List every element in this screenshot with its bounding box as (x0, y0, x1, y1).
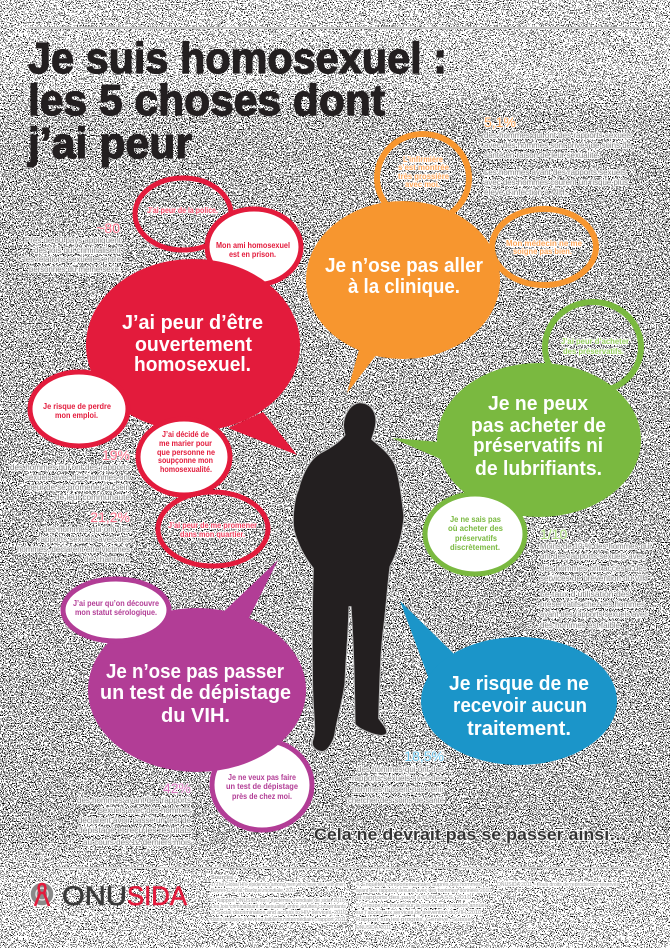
statistic: 18,5%: des hommes qui ont des (357, 764, 444, 774)
statistic: 5,1% (484, 114, 632, 197)
sources text: ONUSIDA 2011 – Tous droits de reproduction réservés (497, 882, 619, 888)
statistic: about 80 countries (24, 220, 122, 274)
white bubble: where to buy: discrètement. (450, 542, 500, 552)
logo: ONUSIDA: SIDA (127, 881, 187, 911)
white bubble: serological status (63, 579, 169, 641)
main purple bubble: du VIH. (161, 705, 230, 727)
title: j’ai peur (27, 119, 192, 168)
main red bubble (86, 259, 300, 455)
statistic: 18,5%: 18,5% (404, 748, 444, 764)
outline bubble: doctor: soigne pas bien. (513, 246, 572, 256)
title (27, 34, 447, 168)
sources text: ONUSIDA, 2011 (356, 925, 391, 931)
main green bubble: Je ne peux (488, 393, 588, 415)
outline bubble: doctor: Mon médecin ne me (506, 238, 582, 248)
statistic: 5,1%: élevé d’infection à VIH. (484, 187, 567, 197)
panel: risk of no treatment (400, 601, 617, 765)
white bubble: getting married: me marier pour (159, 438, 213, 448)
statistic: about 80 countries: les relations sexuelles entre (24, 254, 121, 264)
main purple bubble: un test de dépistage (100, 682, 291, 704)
white bubble: getting married: homosexualité. (160, 464, 212, 474)
panel: fear of being openly homosexual (30, 178, 301, 566)
bubble text: test near home (226, 772, 298, 801)
statistic: 21,2%: de chantage (84, 554, 130, 564)
statistic: 42%: des hommes ayant des rapports (77, 795, 191, 805)
outline bubble: nurse: avec moi. (405, 179, 440, 189)
sources text: dans les pays à revenu faible ou intermédiaire, rapport 2011 (211, 917, 346, 923)
main orange bubble (306, 201, 500, 393)
outline bubble: nurse (377, 134, 469, 222)
statistic: 21,2%: rapports sexuels avec des (38, 534, 130, 544)
statistic: 5,1%: avec des hommes sont privés de soins de (484, 140, 631, 150)
statistic: 1/10: préservatifs chez les hommes (540, 599, 645, 609)
sources text: 3. Social discrimination and access to HIV services, 2010 (211, 910, 346, 916)
statistic: about 80 countries: personnes du même sexe. (29, 264, 121, 274)
title: les 5 choses dont (28, 76, 385, 125)
main green bubble (392, 363, 641, 517)
panel: afraid to take an HIV test (63, 560, 312, 830)
main blue bubble: recevoir aucun (453, 695, 587, 717)
main red bubble: ouvertement (135, 334, 252, 356)
main purple bubble (88, 560, 306, 772)
main green bubble: de lubrifiants. (475, 458, 602, 480)
statistic: 5,1%: santé en raison de leur sexualité. (484, 150, 600, 160)
statistic: about 80 countries: Près de 80 pays appliquent (25, 235, 122, 245)
statistic: 1/10: ont des rapports sexuels avec (540, 551, 646, 561)
bubble text: test near home: près de chez moi. (232, 791, 292, 801)
sources text: Rapport sur les progrès, Genève, Suisse (356, 917, 471, 923)
statistic: 5,1%: 5,1% (484, 114, 516, 130)
white bubble: friend in prison: est en prison. (229, 249, 276, 259)
outline bubble: nurse: s’est montrée (398, 162, 449, 172)
statistic: about 80 countries: ~80 (96, 220, 120, 236)
statistic: 19%: sexuels avec des hommes ont (25, 472, 131, 482)
statistic: 1/10: 1/10 (540, 526, 567, 542)
white bubble: serological status: mon statut sérologique. (75, 607, 157, 617)
statistic: 18,5% (348, 748, 444, 805)
bubble text: test near home: Je ne veux pas faire (228, 772, 296, 782)
closing statement: Cela ne devrait pas se passer ainsi… (314, 825, 627, 844)
main blue bubble (400, 601, 617, 765)
statistic: 19%: peur de se promener au sein (28, 482, 130, 492)
white bubble: where to buy (425, 494, 525, 574)
statistic: 5,1%: des hommes qui ont des rapports sexuels (484, 130, 632, 140)
outline bubble: neighbourhood: J’ai peur de me promener (168, 520, 258, 530)
sources text: 2. Rapport ONUSIDA sur l’épidémie mondiale de sida, 2010. (211, 898, 346, 904)
statistic: 19%: 19% (102, 447, 130, 463)
statistic: 21,2% (17, 509, 130, 564)
statistic: 19%: de leur communauté (55, 492, 130, 502)
white bubble: where to buy: préservatifs (455, 533, 497, 543)
white bubble: losing job: Je risque de perdre (43, 401, 111, 411)
white bubble: where to buy: où acheter des (448, 523, 503, 533)
statistic: 19%: des hommes qui ont des rapports (10, 462, 130, 472)
outline bubble: nurse: L’infirmière (403, 154, 443, 164)
silhouette of a man (293, 403, 404, 752)
statistic: 42%: déclarent avoir passé un test de (78, 815, 191, 825)
main blue bubble: Je risque de ne (449, 673, 589, 695)
white bubble: friend in prison (207, 209, 301, 285)
main red bubble: J’ai peur d’être (122, 312, 263, 334)
bubble text: test near home: un test de dépistage (226, 781, 298, 791)
main blue bubble: traitement. (467, 718, 571, 740)
outline bubble: doctor (492, 209, 596, 285)
outline bubble: neighbourhood (158, 492, 268, 566)
white bubble: getting married: J’ai décidé de (162, 429, 209, 439)
white bubble: getting married: que personne ne (157, 447, 215, 457)
logo: ONUSIDA: ONU (62, 881, 127, 911)
statistic: 1/10: services de prévention du VIH (540, 573, 648, 583)
outline bubble: afraid to buy condoms (545, 302, 641, 392)
sources text (211, 875, 619, 931)
white bubble: where to buy: Je ne sais pas (450, 514, 501, 524)
statistic: 5,1%: avec des hommes courent un risque plus (484, 177, 628, 187)
statistic: 1/10: Le taux d’utilisation des (540, 589, 630, 599)
statistic: 18,5%: rapports sexuels avec des (352, 773, 444, 783)
title: Je suis homosexuel : (28, 34, 447, 83)
sources text: Sources : (211, 875, 237, 881)
statistic: 42% (77, 780, 191, 847)
white bubble: losing job: mon emploi. (55, 410, 98, 420)
outline bubble: police (135, 178, 231, 250)
statistic: 18,5%: hommes n’osent pas venir (352, 784, 444, 794)
statistic: 1/10 (540, 526, 651, 630)
main purple bubble: Je n’ose pas passer (106, 661, 284, 683)
main green bubble: préservatifs ni (473, 435, 603, 457)
sources text: et rapports des pays à l’UNGASS, 2010 (356, 895, 471, 901)
statistic: 21,2%: des hommes qui ont des (43, 524, 130, 534)
white bubble: losing job (30, 372, 128, 446)
sources text: sur l’accès aux services de prévention du VIH, 2010 (356, 910, 481, 916)
statistic: 1/10: ayant des rapports sexuels avec (540, 609, 649, 619)
main red bubble: homosexuel. (134, 354, 251, 376)
sources text: Beyrer C, et al. Banque mondiale, 2011 (211, 888, 296, 894)
statistic: 19% (10, 447, 131, 502)
white bubble: test near home (212, 740, 312, 830)
statistic: 18,5%: chercher des soins de santé (348, 795, 444, 805)
statistic: about 80 countries: des lois qui criminalisent (34, 245, 122, 255)
statistic: 1/10: des hommes est faible (540, 620, 620, 630)
icon: emblem with red ribbon (30, 882, 54, 906)
statistic: 42%: dépistage et reçu les résultats (78, 825, 191, 835)
panel: afraid to go to the clinic (306, 134, 596, 393)
main orange bubble: Je n’ose pas aller (325, 255, 483, 277)
sources text: 5. Groupe de travail sur la prévention, rapport annuel (356, 903, 486, 909)
white bubble: serological status: J’ai peur qu’on découvre (73, 598, 159, 608)
sources text: 4. Enquêtes comportementales auprès des hommes (356, 882, 481, 888)
outline bubble: police: J’ai peur de la police. (147, 205, 218, 215)
statistic: 42%: sexuels avec des hommes (99, 805, 191, 815)
outline bubble: afraid to buy condoms: J’ai peur d’acheter (561, 336, 630, 346)
outline bubble: neighbourhood: dans mon quartier. (180, 529, 245, 539)
sources text: Les lois criminalisant la sexualité entre adultes consentants (211, 904, 346, 910)
statistic: 42%: 42% (163, 780, 191, 796)
panel: cannot buy condoms or lubricants (392, 302, 641, 574)
statistic: 42%: au cours des 12 derniers mois (83, 837, 191, 847)
outline bubble: nurse: très grossière (398, 171, 449, 181)
main green bubble: pas acheter de (471, 415, 606, 437)
statistic: 5,1%: Les hommes ayant des rapports sexuels (484, 167, 626, 177)
sources text: ayant des rapports sexuels avec des hommes, données 2010 (356, 888, 491, 894)
statistic: 21,2%: hommes, déclarent être victimes (17, 544, 130, 554)
white bubble: getting married: soupçonne mon (158, 455, 213, 465)
outline bubble: afraid to buy condoms: des préservatifs. (563, 346, 624, 356)
logo: ONUSIDA (30, 881, 187, 911)
statistic: 1/10: Moins de 10 % des hommes qui (540, 541, 651, 551)
sources text: 1. The Global HIV epidemics among men who have sex with men. (211, 882, 346, 888)
statistic: 21,2%: 21,2% (90, 509, 130, 525)
statistic: 1/10: des hommes ont accès à des (540, 563, 647, 573)
white bubble: getting married (138, 419, 230, 495)
main orange bubble: à la clinique. (348, 276, 460, 298)
white bubble: friend in prison: Mon ami homosexuel (216, 240, 290, 250)
